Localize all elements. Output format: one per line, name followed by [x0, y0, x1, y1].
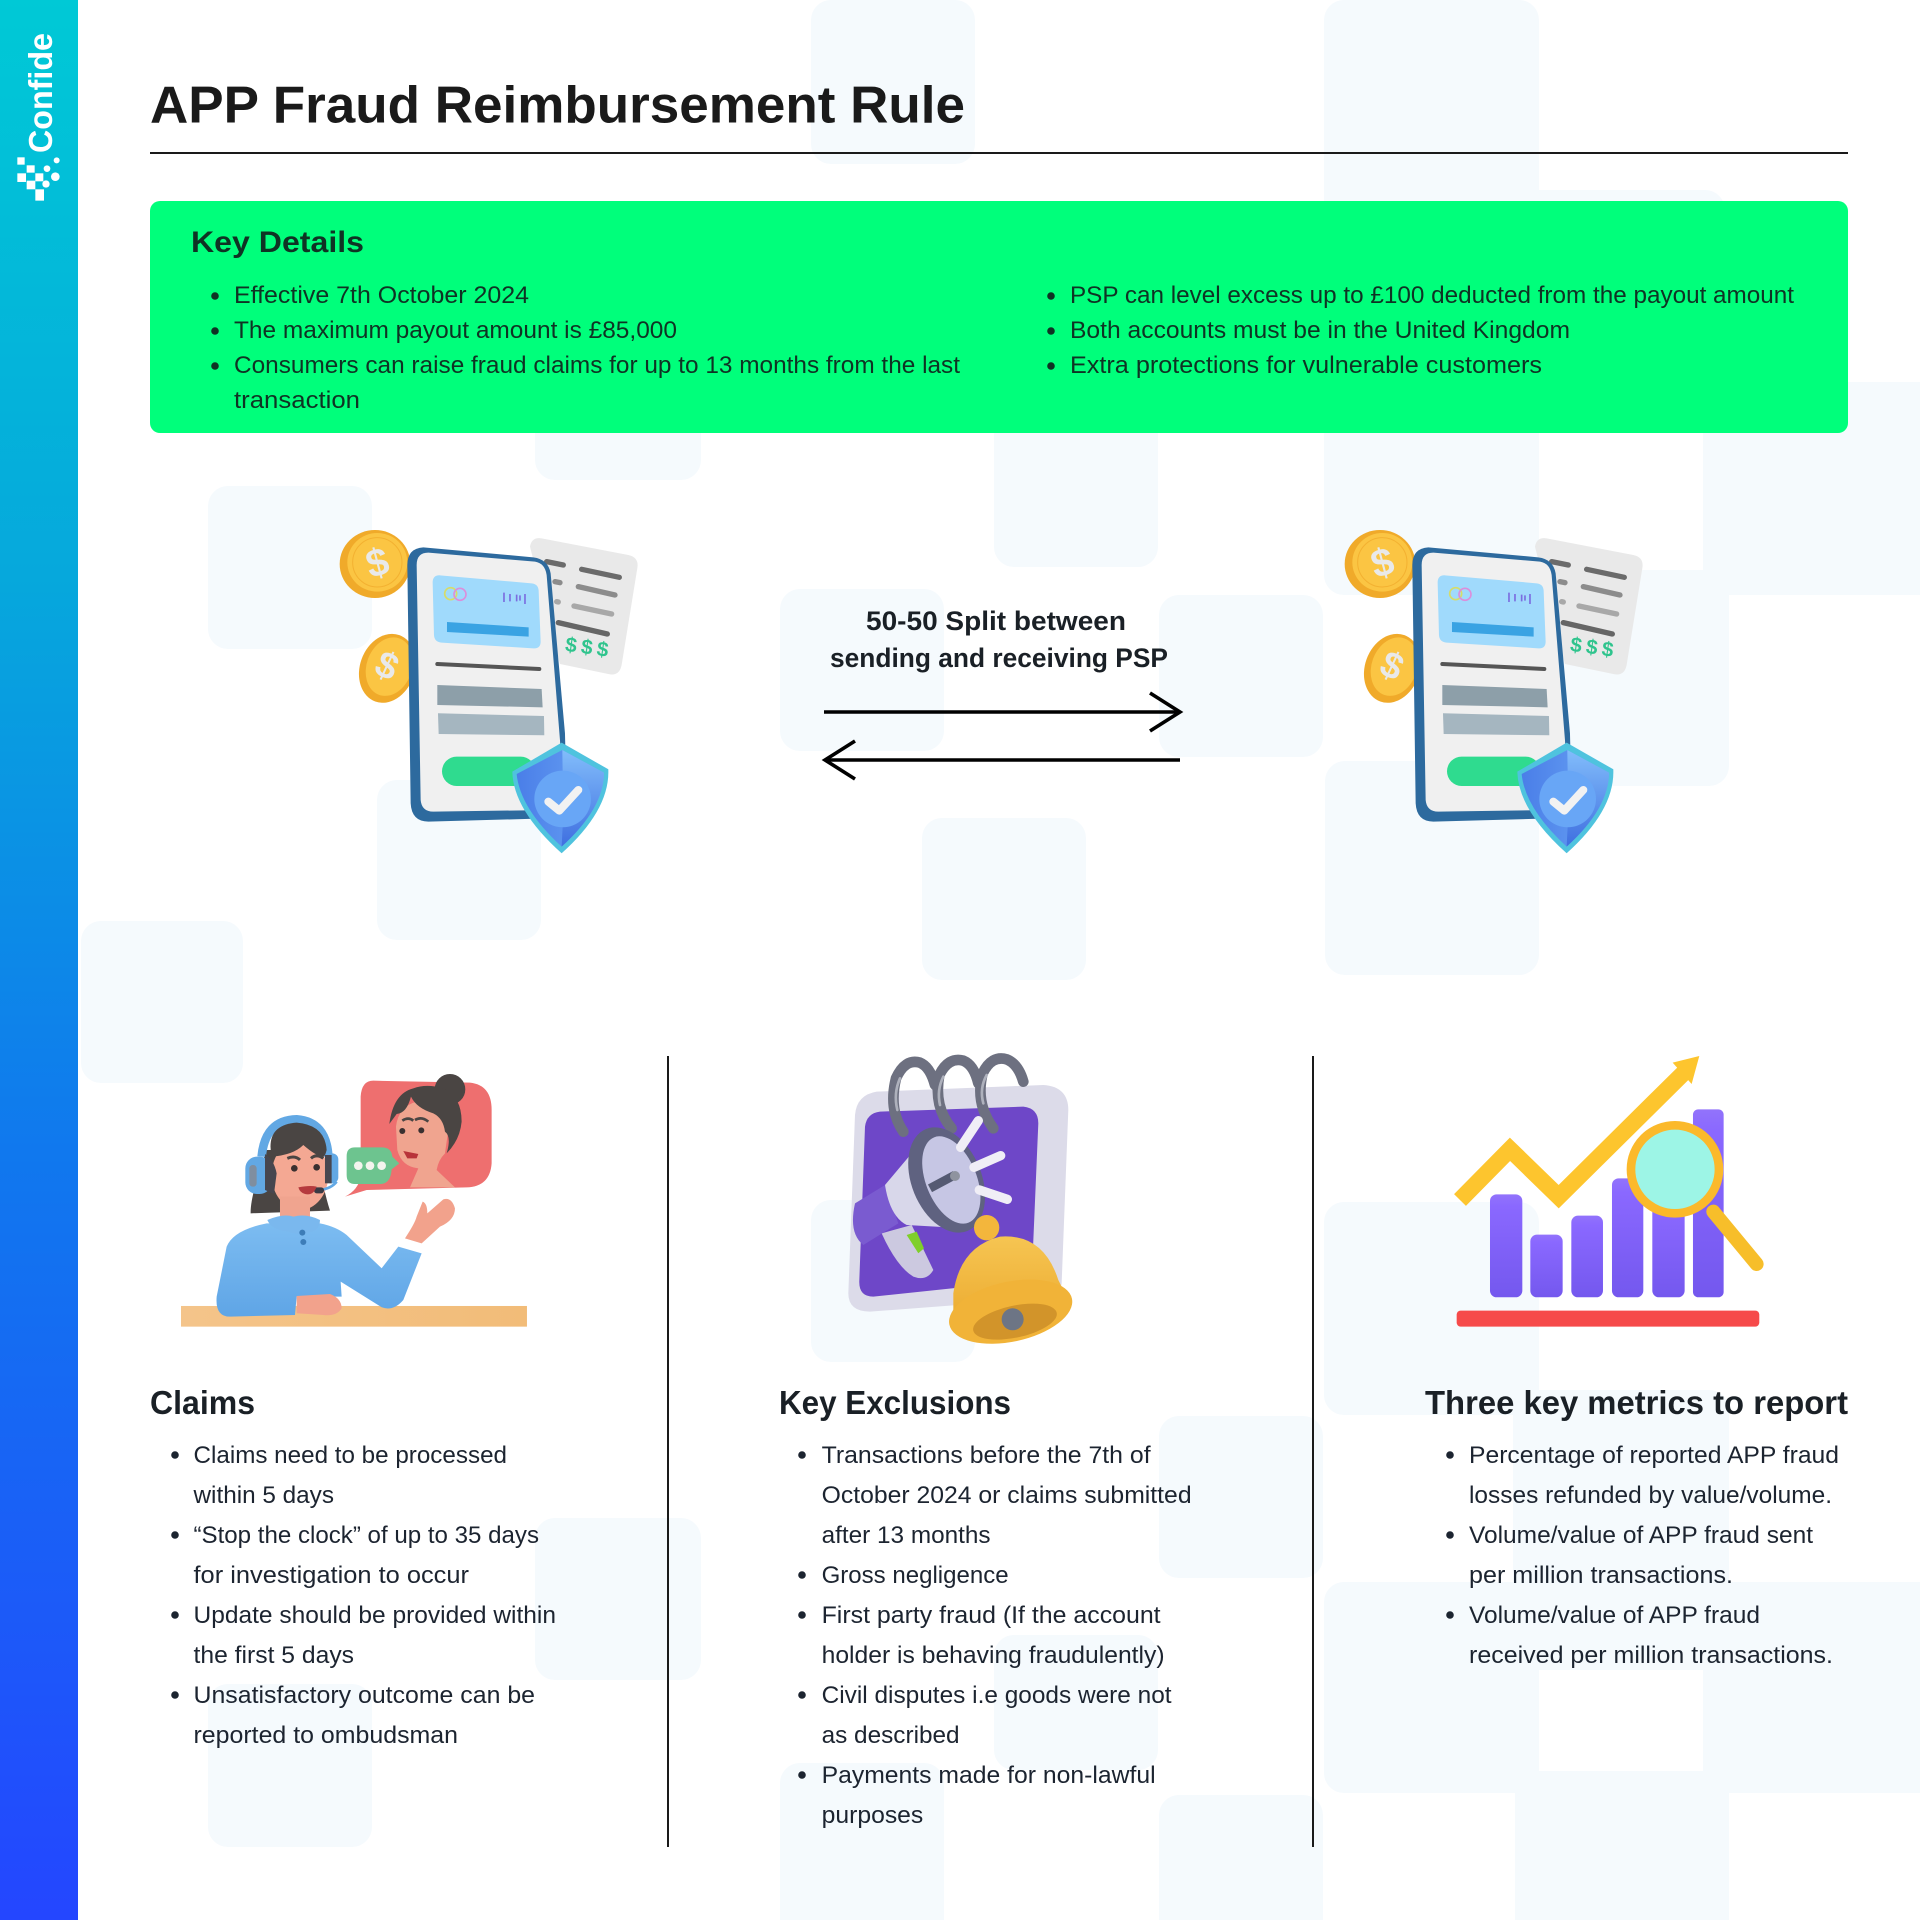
icon: phone with coins and shield (receiving PSP): [1345, 530, 1643, 853]
bullet list: key exclusions: holder is behaving fraudulently): [822, 1642, 1165, 1669]
bullet list: three key metrics: Percentage of reported APP fraud: [1469, 1442, 1839, 1469]
logo wordmark: Confide: [22, 33, 59, 153]
arrow: sending to receiving: [824, 693, 1180, 731]
bullet list: claims: Unsatisfactory outcome can be: [194, 1682, 535, 1709]
bullet list: three key metrics: Volume/value of APP fraud: [1469, 1602, 1760, 1629]
bullet list: key exclusions: purposes: [822, 1802, 923, 1829]
bullet list: key exclusions: Gross negligence: [822, 1562, 1009, 1589]
bullet list: claims: within 5 days: [193, 1482, 334, 1509]
text: 50-50 split label: 50-50 Split between: [866, 606, 1126, 636]
bullet list: claims: Claims need to be processed: [194, 1442, 507, 1469]
icon: phone with coins and shield (sending PSP): [340, 530, 638, 853]
bullet list: three key metrics: losses refunded by value/volume.: [1469, 1482, 1832, 1509]
icon: calendar with megaphone and bell: [848, 1059, 1078, 1354]
bullet list: key exclusions: October 2024 or claims submitted: [822, 1482, 1192, 1509]
bullet list: key exclusions: Payments made for non-lawful: [822, 1762, 1156, 1789]
icon: phone with coins and shield (receiving PSP): $: [1374, 642, 1411, 689]
icon: support agent on video call: [181, 1074, 527, 1327]
bullet list: right column: Extra protections for vulnerable customers: [1070, 352, 1542, 379]
bullet list: key exclusions: First party fraud (If the account: [822, 1602, 1161, 1629]
text: 50-50 split label: sending and receiving PSP: [830, 643, 1168, 673]
icon: phone with coins and shield (sending PSP): $$$: [564, 633, 610, 662]
bullet list: key exclusions: Civil disputes i.e goods were not: [822, 1682, 1172, 1709]
panel: key details: [150, 201, 1848, 433]
bullet list: right column: [1047, 282, 1794, 379]
bullet list: key exclusions: as described: [822, 1722, 960, 1749]
bullet list: claims: “Stop the clock” of up to 35 days: [194, 1522, 539, 1549]
heading: key details: Key Details: [191, 226, 364, 259]
icon: phone with coins and shield (receiving PSP): $$$: [1569, 633, 1615, 662]
bullet list: right column: PSP can level excess up to £100 deducted from the payout amount: [1070, 282, 1794, 309]
bullet list: left column: The maximum payout amount is £85,000: [234, 317, 677, 344]
bullet list: three key metrics: [1446, 1442, 1839, 1669]
bullet list: three key metrics: per million transactions.: [1469, 1562, 1733, 1589]
icon: growth chart with magnifier: [1457, 1056, 1759, 1327]
bullet list: claims: [171, 1442, 556, 1749]
heading: claims: Claims: [150, 1384, 255, 1421]
logo mark: [17, 157, 60, 201]
bullet list: left column: transaction: [234, 387, 360, 414]
bullet list: claims: for investigation to occur: [194, 1562, 469, 1589]
bullet list: right column: Both accounts must be in the United Kingdom: [1070, 317, 1570, 344]
bullet list: three key metrics: received per million transactions.: [1469, 1642, 1833, 1669]
bullet list: three key metrics: Volume/value of APP fraud sent: [1469, 1522, 1813, 1549]
bullet list: left column: [211, 282, 960, 414]
sidebar with Confide logo: [0, 0, 78, 1920]
bullet list: key exclusions: [798, 1442, 1192, 1829]
text: 50-50 split label: [830, 606, 1168, 673]
bullet list: left column: Effective 7th October 2024: [234, 282, 529, 309]
bullet list: left column: Consumers can raise fraud claims for up to 13 months from the last: [234, 352, 960, 379]
arrow: receiving to sending: [825, 741, 1180, 779]
heading: three key metrics: Three key metrics to report: [1425, 1384, 1848, 1421]
bullet list: claims: Update should be provided within: [194, 1602, 556, 1629]
bullet list: claims: reported to ombudsman: [194, 1722, 458, 1749]
bullet list: key exclusions: after 13 months: [822, 1522, 991, 1549]
icon: phone with coins and shield (receiving PSP): $: [1366, 539, 1399, 587]
panel: key exclusions: [779, 1384, 1192, 1829]
title: APP Fraud Reimbursement Rule: [150, 76, 965, 134]
icon: phone with coins and shield (sending PSP): $: [361, 539, 394, 587]
bullet list: key exclusions: Transactions before the 7th of: [822, 1442, 1151, 1469]
panel: three key metrics: [1425, 1384, 1848, 1669]
panel: claims: [150, 1384, 556, 1749]
bullet list: claims: the first 5 days: [194, 1642, 354, 1669]
icon: phone with coins and shield (sending PSP): $: [369, 642, 406, 689]
heading: key exclusions: Key Exclusions: [779, 1384, 1011, 1421]
